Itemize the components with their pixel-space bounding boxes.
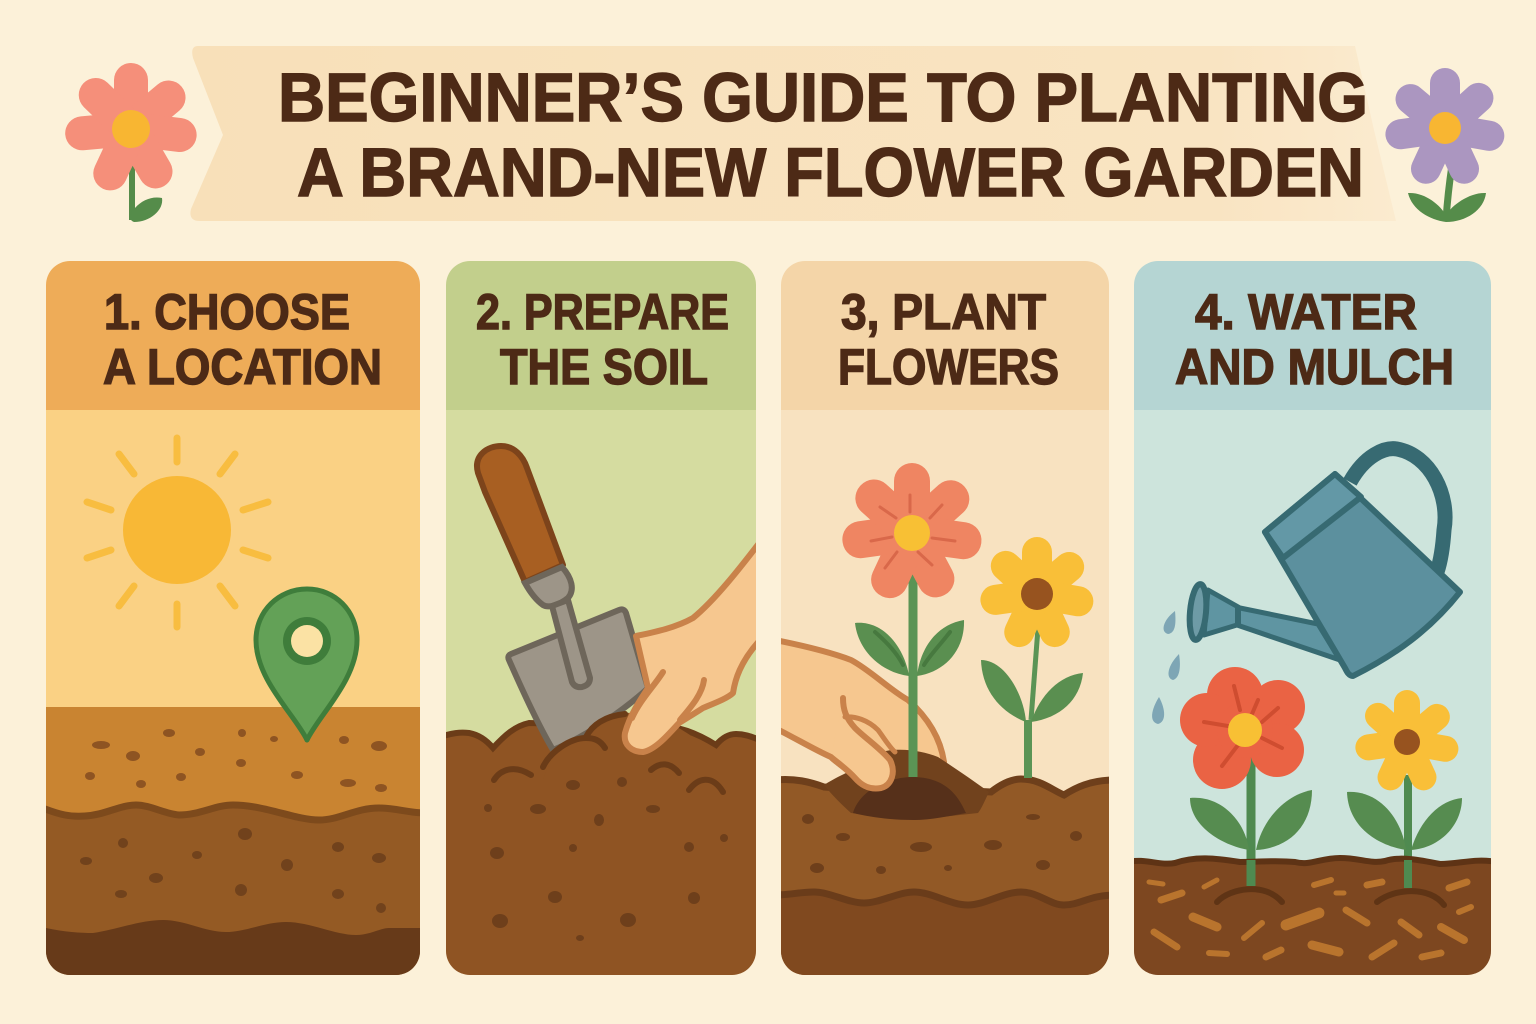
- title banner: [190, 46, 1396, 221]
- step 2 header: THE SOIL: [500, 339, 708, 395]
- icon: watering can: [1188, 449, 1460, 676]
- icon: sun: [87, 438, 268, 627]
- panel: step 4 water and mulch: [1128, 261, 1497, 985]
- panel: step 2 prepare the soil: [440, 261, 760, 985]
- icon: coral flower: [840, 463, 984, 777]
- panel: step 1 choose a location: [40, 261, 425, 985]
- icon: hand: [625, 542, 760, 752]
- soil layers: [40, 707, 425, 985]
- icon: yellow flower: [1347, 690, 1462, 856]
- panel: step 3 plant flowers: [775, 261, 1115, 985]
- step 4 header: AND MULCH: [1175, 339, 1454, 395]
- icon: water drops: [1152, 611, 1180, 724]
- step 2 header: [446, 261, 756, 410]
- step 3 header: [781, 261, 1109, 410]
- soil front mound: [564, 712, 690, 748]
- step 1 header: A LOCATION: [103, 339, 382, 395]
- icon: pink flower, top left: [64, 63, 199, 222]
- title: [278, 59, 1368, 211]
- step 4 header: 4. WATER: [1195, 284, 1417, 340]
- icon: flower stems in soil: [1251, 860, 1408, 888]
- step 3 header: FLOWERS: [838, 339, 1059, 395]
- icon: yellow flower: [978, 537, 1096, 778]
- title: BEGINNER’S GUIDE TO PLANTING: [278, 59, 1368, 136]
- soil: [440, 723, 760, 985]
- step 4 header: [1134, 261, 1491, 410]
- step 1 header: 1. CHOOSE: [104, 284, 350, 340]
- icon: purple flower, top right: [1383, 68, 1507, 222]
- icon: red flower: [1180, 667, 1312, 859]
- icon: map pin: [256, 589, 357, 740]
- mulch soil: [1128, 858, 1497, 985]
- icon: hand: [781, 638, 947, 772]
- step 3 header: 3, PLANT: [841, 284, 1046, 340]
- step 1 header: [46, 261, 420, 410]
- soil mound: [824, 750, 989, 820]
- icon: finger: [831, 698, 895, 789]
- soil texture: [484, 714, 728, 941]
- step 2 header: 2. PREPARE: [476, 284, 729, 340]
- soil layers: [775, 779, 1115, 985]
- icon: trowel: [477, 446, 648, 750]
- title: A BRAND-NEW FLOWER GARDEN: [297, 134, 1364, 211]
